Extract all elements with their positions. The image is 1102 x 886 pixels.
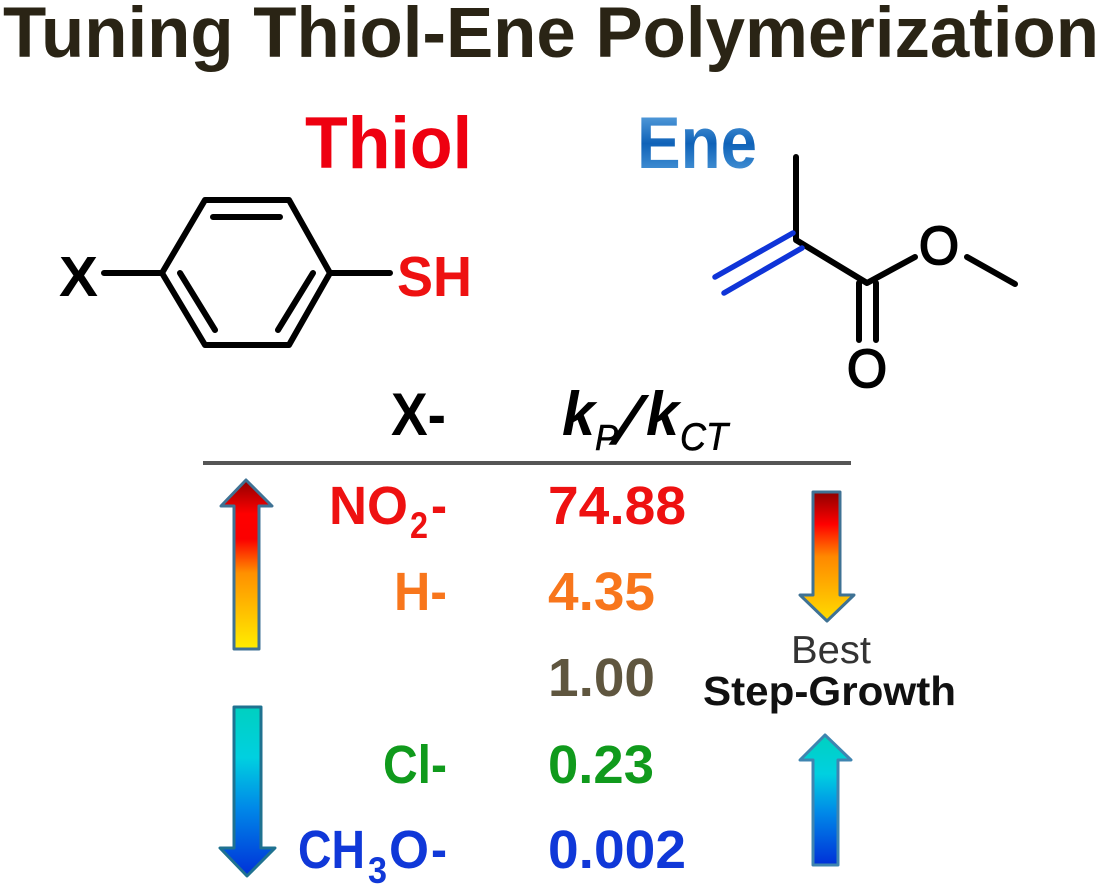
heading: Thiol: Thiol <box>305 103 472 184</box>
table header: kP/kCT: CT <box>680 416 731 459</box>
ene structure: methyl methacrylate <box>715 157 1015 399</box>
row: CH3O: O <box>389 820 429 880</box>
table header: kP/kCT: k <box>646 380 682 449</box>
row: NO2 <box>329 476 686 546</box>
thiol structure: substituted benzene ring <box>59 200 472 345</box>
table header: kP/kCT <box>562 380 731 459</box>
row: H <box>394 562 655 622</box>
arrow: left up hot <box>221 480 272 649</box>
table header: kP/kCT: k <box>562 380 598 449</box>
table header: kP/kCT: P <box>595 417 618 458</box>
row: NO2: NO <box>329 476 408 536</box>
ene structure: methyl methacrylate: O <box>919 216 959 276</box>
row: NO2: 74.88 <box>548 476 686 536</box>
row: H: H- <box>394 562 447 622</box>
row: CH3O: 0.002 <box>548 820 686 880</box>
arrow: right down hot <box>800 492 854 621</box>
heading: Ene: Ene <box>637 103 757 184</box>
row: CH3O <box>298 820 686 886</box>
row: H: 4.35 <box>548 562 655 622</box>
thiol structure: substituted benzene ring: X <box>59 245 98 309</box>
thiol structure: substituted benzene ring: SH <box>397 245 472 309</box>
label: Best: Best <box>791 629 871 672</box>
row: Cl: Cl- <box>383 735 447 795</box>
table header: kP/kCT: / <box>608 383 650 459</box>
row: Cl: 0.23 <box>548 735 654 795</box>
row: NO2: - <box>431 476 447 536</box>
table rule <box>203 461 851 465</box>
label: Step-Growth: Step-Growth <box>703 668 956 714</box>
ene structure: methyl methacrylate: O <box>847 339 887 399</box>
row: reference value: 1.00 <box>548 648 655 708</box>
row: Cl <box>383 735 654 795</box>
row: CH3O: - <box>431 820 447 880</box>
row: CH3O: CH <box>298 820 365 880</box>
row: NO2: 2 <box>410 505 428 546</box>
arrow: right up cold <box>800 735 851 865</box>
arrow: left down cold <box>220 707 275 876</box>
table header: X-: X- <box>391 381 446 448</box>
